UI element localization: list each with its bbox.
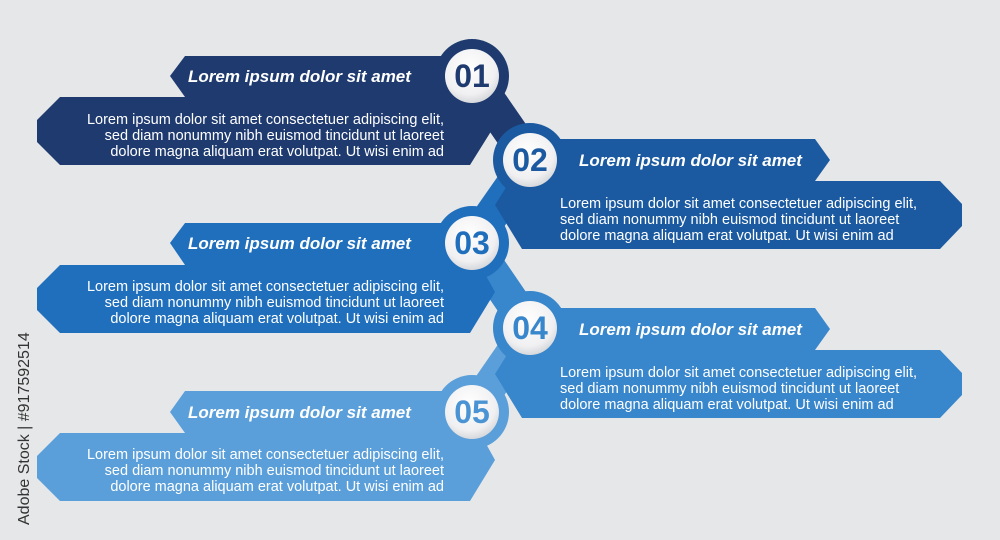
step 02: sed diam nonummy nibh euismod tincidunt ut laoreet [560,212,899,228]
step 03: dolore magna aliquam erat volutpat. Ut wisi enim ad [110,311,444,327]
step 05 [37,375,509,501]
step 02: Lorem ipsum dolor sit amet consectetuer adipiscing elit, [560,196,917,212]
step 02: 02 [512,142,548,178]
step 02: Lorem ipsum dolor sit amet [579,151,803,170]
step 03: 03 [454,225,490,261]
step 01: dolore magna aliquam erat volutpat. Ut wisi enim ad [110,144,444,160]
step 01: 01 [454,58,490,94]
connector stems [472,76,530,412]
step 05: sed diam nonummy nibh euismod tincidunt ut laoreet [105,463,444,479]
step 03: Lorem ipsum dolor sit amet consectetuer adipiscing elit, [87,279,444,295]
step 05: Lorem ipsum dolor sit amet consectetuer adipiscing elit, [87,447,444,463]
step 04 [493,291,962,418]
step 04: dolore magna aliquam erat volutpat. Ut wisi enim ad [560,397,894,413]
step 02: dolore magna aliquam erat volutpat. Ut wisi enim ad [560,228,894,244]
step 05: 05 [454,394,490,430]
step 05: Lorem ipsum dolor sit amet [188,403,412,422]
step 04: sed diam nonummy nibh euismod tincidunt ut laoreet [560,381,899,397]
step 01: sed diam nonummy nibh euismod tincidunt ut laoreet [105,128,444,144]
step 03: Lorem ipsum dolor sit amet [188,234,412,253]
step 01 [37,39,509,165]
step 04: Lorem ipsum dolor sit amet consectetuer adipiscing elit, [560,365,917,381]
step 01: Lorem ipsum dolor sit amet [188,67,412,86]
step 05: dolore magna aliquam erat volutpat. Ut wisi enim ad [110,479,444,495]
step 03 [37,206,509,333]
step 04: 04 [512,310,548,346]
step 01: Lorem ipsum dolor sit amet consectetuer adipiscing elit, [87,112,444,128]
step 04: Lorem ipsum dolor sit amet [579,320,803,339]
vertical watermark text: Adobe Stock | #917592514 [16,332,33,525]
step 03: sed diam nonummy nibh euismod tincidunt ut laoreet [105,295,444,311]
step 02 [493,123,962,249]
